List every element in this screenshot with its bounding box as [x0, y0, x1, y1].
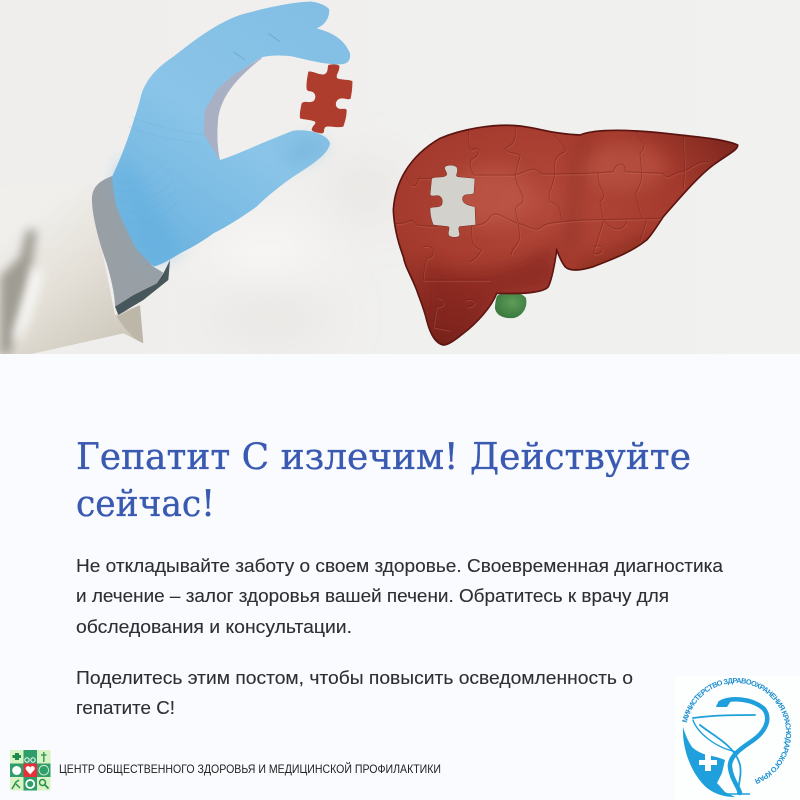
ring text: МИНИСТЕРСТВО ЗДРАВООХРАНЕНИЯ КРАСНОДАРСКОГО КРАЯ [682, 678, 792, 784]
photo: gloved hand with puzzle piece and liver [0, 0, 800, 357]
puzzle hole [430, 165, 476, 237]
inner palm shadow [203, 57, 262, 159]
shirt cuff [92, 176, 170, 315]
icon: red puzzle piece [300, 64, 352, 133]
text block: share [76, 668, 633, 718]
puzzle seams [396, 128, 709, 331]
bowl and snake [693, 699, 767, 793]
heading [76, 437, 691, 525]
cross [699, 754, 717, 771]
text block: call to action: и лечение – залог здоровья вашей печени. Обратитесь к врачу для [76, 586, 669, 606]
glove [112, 2, 350, 267]
text block: share: Поделитесь этим постом, чтобы повысить осведомленность о [76, 668, 633, 688]
glove shading [115, 157, 180, 263]
heading: сейчас! [76, 484, 215, 525]
snake head [716, 700, 731, 707]
icon: public health centre logo grid [10, 750, 50, 790]
ministry logo [682, 678, 792, 797]
base [727, 793, 750, 795]
logo white backing [675, 676, 800, 800]
text block: call to action: обследования и консультации. [76, 617, 352, 637]
icon: gloved hand in lab coat [0, 2, 350, 357]
icon: liver puzzle [393, 125, 738, 345]
heading: Гепатит С излечим! Действуйте [76, 437, 691, 478]
lab coat sleeve [0, 206, 144, 354]
text block: share: гепатите С! [76, 698, 175, 718]
icon: gallbladder [495, 292, 526, 318]
footer organisation name: ЦЕНТР ОБЩЕСТВЕННОГО ЗДОРОВЬЯ И МЕДИЦИНСКОЙ ПРОФИЛАКТИКИ [59, 762, 441, 776]
text block: call to action: Не откладывайте заботу о своем здоровье. Своевременная диагностика [76, 556, 724, 576]
text block: call to action [76, 556, 724, 637]
wrist ribbing [128, 116, 203, 188]
crescent with cross [683, 727, 735, 797]
